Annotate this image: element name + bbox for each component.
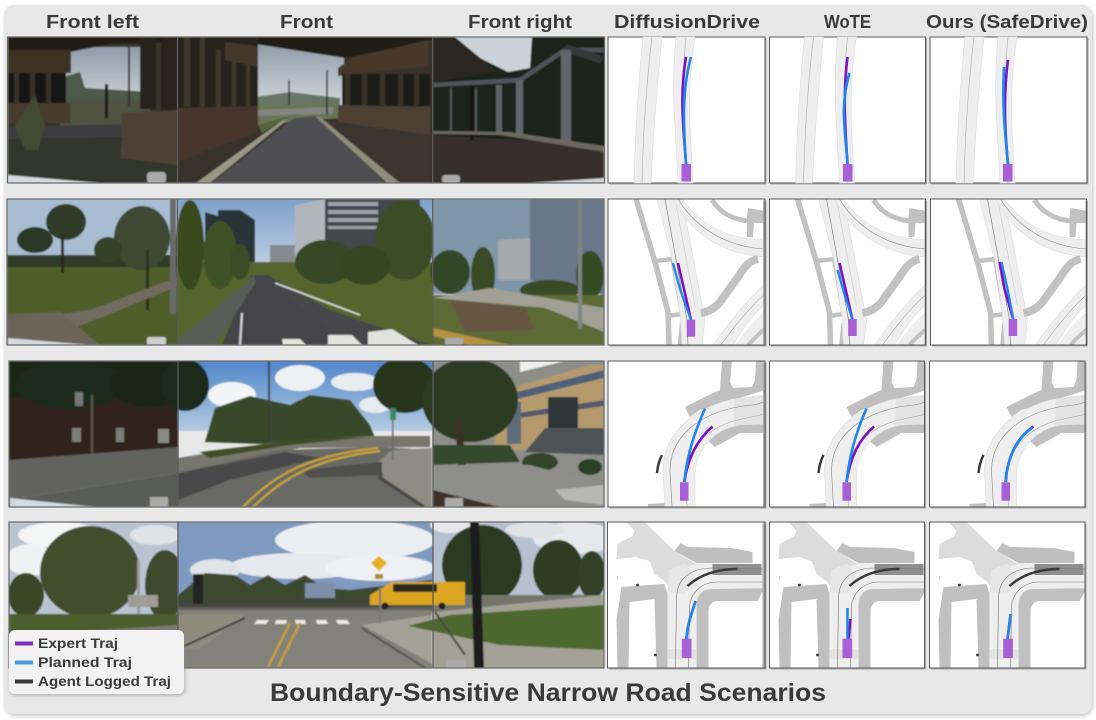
map panel: row 2 DiffusionDrive [608, 199, 766, 346]
map panel: row 4 Ours [930, 522, 1086, 670]
camera photo strip: row 4 crosswalk with school bus [6, 517, 617, 668]
map panel: row 3 WoTE [770, 361, 926, 508]
heading: DiffusionDrive: DiffusionDrive [614, 11, 760, 32]
legend: Planned Traj [38, 655, 132, 670]
map panel: row 3 DiffusionDrive [608, 361, 766, 508]
map panel: row 1 DiffusionDrive [608, 37, 766, 184]
map panel: row 3 Ours [930, 361, 1086, 508]
map panel: row 1 Ours [930, 37, 1088, 184]
camera seams [178, 37, 433, 668]
heading: Front right: Front right [468, 11, 572, 32]
camera photo strip: row 2 campus road [7, 199, 604, 345]
map panel: row 4 WoTE [770, 522, 926, 670]
legend [9, 630, 185, 696]
caption title: Boundary-Sensitive Narrow Road Scenarios [270, 679, 826, 707]
camera photo strip: row 1 underpass [8, 37, 605, 183]
photo frames [7, 37, 604, 668]
map panel: row 1 WoTE [770, 37, 927, 184]
map panel: row 2 WoTE [770, 199, 927, 346]
map panel: row 2 Ours [930, 199, 1088, 346]
camera photo strip: row 3 curved road [9, 357, 604, 507]
legend: Agent Logged Traj [38, 674, 171, 689]
heading: Ours (SafeDrive): Ours (SafeDrive) [926, 11, 1088, 32]
heading: WoTE: WoTE [824, 11, 871, 32]
heading: Front left: Front left [46, 11, 139, 32]
map panel: row 4 DiffusionDrive [608, 522, 766, 670]
legend: Expert Traj [38, 636, 118, 651]
heading: Front: Front [280, 11, 333, 32]
